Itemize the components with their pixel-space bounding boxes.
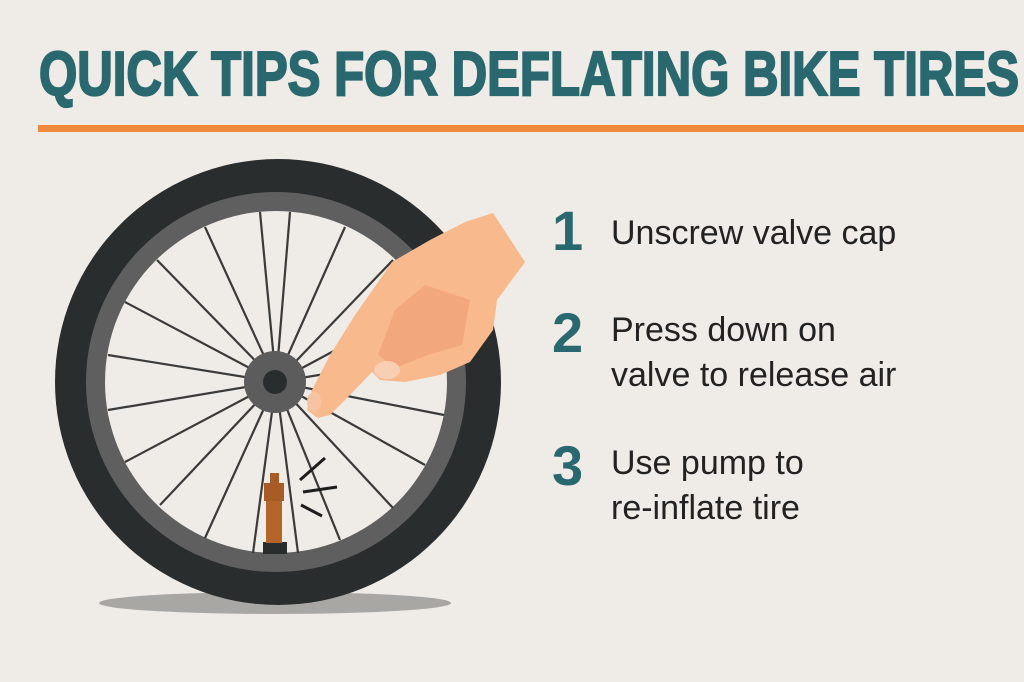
valve	[263, 542, 287, 554]
step 2: 2	[552, 301, 583, 364]
step 2	[552, 301, 896, 394]
step 3: 3	[552, 434, 583, 497]
step 2: valve to release air	[611, 356, 896, 394]
tire	[55, 159, 501, 605]
spokes	[108, 212, 444, 553]
step 1	[552, 199, 896, 262]
shadow	[99, 592, 451, 614]
wheel illustration	[55, 159, 525, 614]
air lines	[300, 458, 337, 516]
step 3	[552, 434, 804, 527]
step 2: Press down on	[611, 311, 836, 349]
hub	[244, 351, 306, 413]
step 3: Use pump to	[611, 444, 804, 482]
rim	[86, 192, 466, 572]
hand	[307, 213, 525, 418]
step 1: 1	[552, 199, 583, 262]
step 3: re-inflate tire	[611, 489, 800, 527]
orange divider	[38, 125, 1024, 132]
step 1: Unscrew valve cap	[611, 214, 896, 252]
